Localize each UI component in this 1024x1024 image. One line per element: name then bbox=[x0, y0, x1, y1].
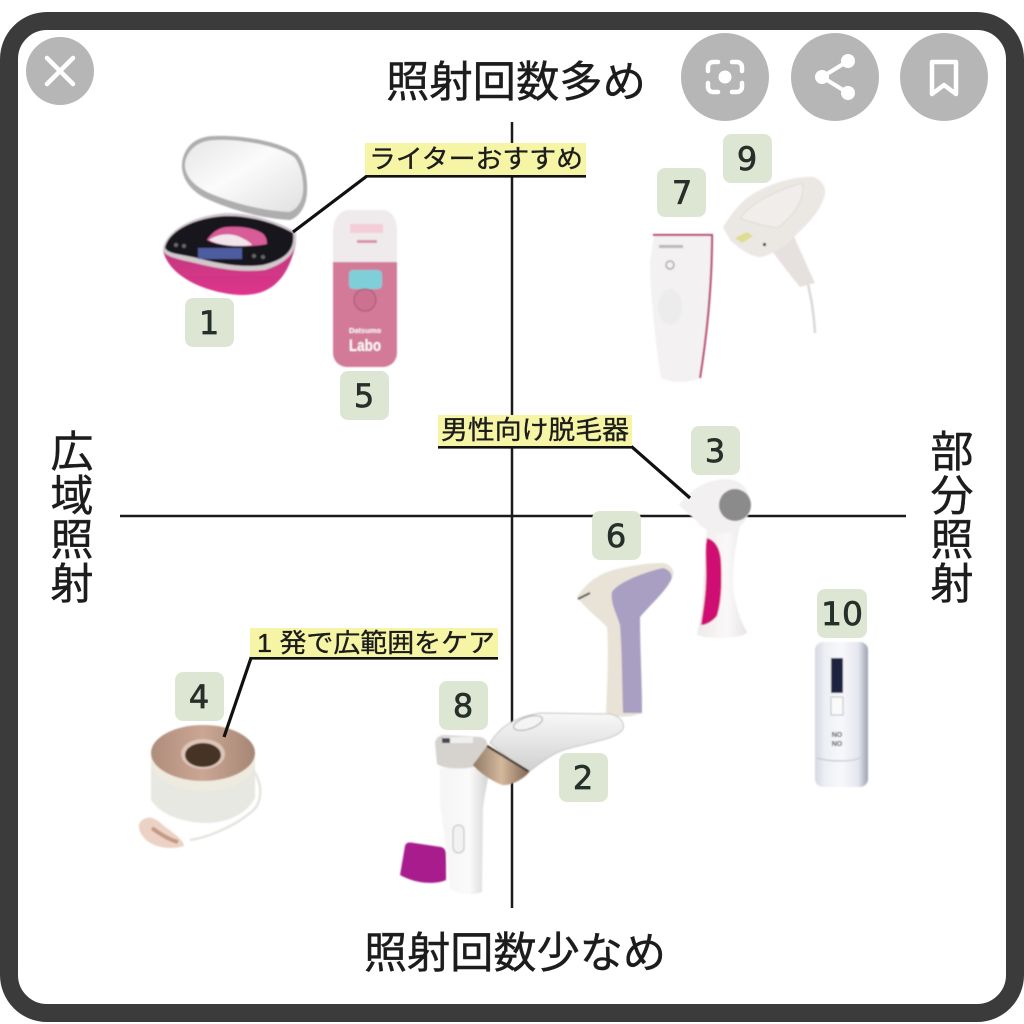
badge 10 bbox=[817, 589, 867, 638]
badge 6: 6 bbox=[606, 517, 626, 555]
heading: wide area: 域 bbox=[50, 473, 94, 521]
device 5: Datsumo Labo bbox=[333, 210, 397, 367]
heading: wide area: 照 bbox=[50, 517, 94, 565]
device 2: silver handheld with bronze head bbox=[473, 713, 623, 785]
heading: wide area: 射 bbox=[50, 561, 94, 609]
heading: partial area: 照 bbox=[930, 517, 974, 565]
badge 3 bbox=[691, 426, 740, 475]
callout: wide care per flash: 1 発で広範囲をケア bbox=[257, 628, 495, 658]
device 7: white handheld bbox=[650, 235, 712, 382]
badge 5 bbox=[340, 371, 389, 420]
callout: for men: 男性向け脱毛器 bbox=[441, 415, 629, 445]
badge 8: 8 bbox=[453, 687, 473, 725]
heading: partial area: 部 bbox=[930, 429, 974, 477]
badge 1 bbox=[185, 298, 234, 347]
badge 10: 10 bbox=[821, 595, 863, 633]
device 3: Tria handheld bbox=[679, 479, 751, 638]
badge 9: 9 bbox=[737, 140, 757, 178]
device 10: silver compact: NO bbox=[832, 741, 843, 748]
badge 7 bbox=[657, 168, 706, 217]
badge 6 bbox=[592, 511, 641, 560]
badge 4 bbox=[175, 672, 224, 721]
device 8: white handheld with magenta cap bbox=[400, 735, 489, 894]
callout: for men bbox=[438, 415, 690, 498]
callout: wide care per flash bbox=[224, 628, 498, 737]
device 10: silver compact bbox=[815, 642, 868, 787]
heading: partial area: 分 bbox=[930, 473, 974, 521]
badge 2 bbox=[559, 753, 608, 802]
device 5: Datsumo Labo: Labo bbox=[349, 336, 381, 355]
heading: many flashes: 照射回数多め bbox=[386, 59, 646, 107]
lens search button bbox=[681, 33, 769, 121]
heading: wide area: 広 bbox=[50, 429, 94, 477]
device 4: round rose-gold device bbox=[139, 725, 260, 848]
device 5: Datsumo Labo: Datsumo bbox=[349, 326, 381, 335]
share button bbox=[791, 33, 879, 121]
device 6: lilac handheld bbox=[577, 563, 673, 717]
badge 5: 5 bbox=[354, 377, 374, 415]
device 1: mirror case, pink bbox=[163, 136, 307, 295]
badge 3: 3 bbox=[705, 432, 725, 470]
callout: lighter recommendation bbox=[293, 143, 586, 232]
device 10: silver compact: NO bbox=[832, 732, 843, 739]
close button bbox=[26, 37, 94, 105]
badge 8 bbox=[439, 681, 488, 730]
badge 4: 4 bbox=[189, 678, 209, 716]
badge 7: 7 bbox=[672, 174, 692, 212]
badge 9 bbox=[723, 134, 772, 183]
heading: partial area: 射 bbox=[930, 561, 974, 609]
device 9: corded white handheld bbox=[723, 177, 825, 333]
callout: lighter recommendation: ライターおすすめ bbox=[369, 144, 583, 174]
vertical axis bbox=[511, 122, 513, 908]
bookmark button bbox=[900, 33, 988, 121]
horizontal axis bbox=[120, 515, 906, 517]
heading: few flashes: 照射回数少なめ bbox=[364, 930, 666, 978]
badge 2: 2 bbox=[573, 759, 593, 797]
badge 1: 1 bbox=[199, 304, 219, 342]
